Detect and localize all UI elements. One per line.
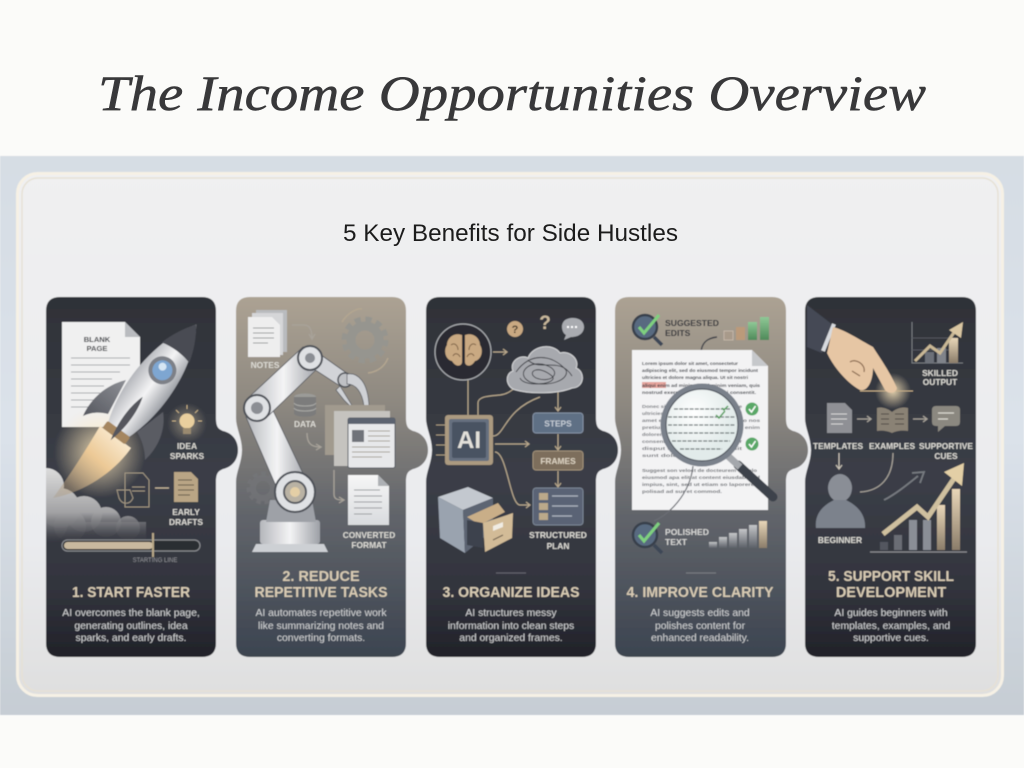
document: sunt dolorem — [642, 453, 692, 458]
arrow: notes to arm — [292, 325, 315, 339]
document: consent ad la sestemon eget dolor — [642, 439, 742, 444]
description — [255, 608, 387, 644]
document: Lorem ipsum dolor sit amet, consectetur — [642, 361, 738, 366]
card 4 background — [615, 297, 808, 657]
progress bar: starting line: STARTING LINE — [133, 558, 177, 564]
document: ultricies et dolore magna aliqua. Ut sit nostri — [642, 375, 748, 380]
description — [832, 608, 950, 644]
label: early drafts — [169, 507, 203, 527]
icon: polished magnifier — [633, 523, 662, 553]
label: early drafts: EARLY — [172, 507, 200, 517]
label: skilled output — [922, 368, 958, 387]
chart: suggested edits bars — [724, 317, 769, 340]
icon: large magnifier — [663, 386, 773, 497]
label: polished text — [665, 527, 709, 547]
label: polished text: POLISHED — [665, 527, 709, 537]
label: data: DATA — [294, 419, 316, 429]
label: polished text: TEXT — [665, 537, 688, 547]
icon: question mark: ? — [539, 313, 551, 334]
document: ultricies et dolore suggesti editor sed — [642, 411, 742, 416]
label: idea sparks — [170, 441, 205, 461]
document — [632, 350, 768, 510]
description — [650, 608, 750, 644]
document: adipiscing elit, sed do eiusmod tempor incidunt — [642, 368, 758, 373]
arrow: to polished text — [654, 466, 693, 521]
label: notes: NOTES — [251, 360, 280, 370]
description: and organized frames. — [459, 633, 563, 644]
description: information into clean steps — [448, 621, 574, 632]
heading: start faster: 1. START FASTER — [72, 585, 190, 601]
box: frames: FRAMES — [540, 456, 576, 466]
chart: growth bars and arrow — [870, 463, 967, 552]
labels: templates, examples, supportive cues: EXAMPLES — [869, 441, 915, 451]
description: AI overcomes the blank page, — [62, 608, 200, 619]
infographic image panel — [0, 156, 1024, 715]
box: frames — [533, 451, 583, 470]
icon: outline to draft — [117, 473, 169, 507]
card 5 background — [805, 297, 976, 657]
description: templates, examples, and — [832, 621, 950, 632]
chart: polished text bars — [709, 521, 767, 548]
description: AI structures messy — [465, 608, 557, 619]
icon: flame — [53, 406, 146, 498]
description: generating outlines, idea — [74, 621, 188, 632]
icon: converted document — [348, 475, 389, 525]
description: polishes content for — [655, 621, 746, 632]
panel: 4 improve clarity — [615, 297, 808, 657]
document: impius, sint, sed ut etiam so laporerem — [642, 482, 760, 487]
icon: filing cabinet — [438, 487, 513, 553]
box: steps: STEPS — [544, 418, 572, 428]
panel: 2 reduce repetitive tasks — [236, 297, 428, 657]
label: skilled output: SKILLED — [922, 368, 958, 378]
arrow: to document — [698, 337, 717, 356]
icon: data cylinder — [294, 394, 316, 417]
subtitle: 5 Key Benefits for Side Hustles — [343, 220, 678, 247]
label: idea sparks: SPARKS — [170, 451, 205, 461]
icon: blank page: PAGE — [87, 344, 107, 353]
icon: AI chip — [436, 415, 493, 465]
label: converted format — [343, 530, 395, 550]
labels: templates, examples, supportive cues — [813, 441, 973, 461]
label: suggested edits: SUGGESTED — [665, 318, 719, 328]
arrow: templates to beginner — [836, 453, 842, 469]
document: polisad ad sur et commod. — [642, 489, 722, 494]
label: structured plan: STRUCTURED — [529, 530, 587, 540]
icon: template doc — [827, 403, 852, 433]
description: enhanced readability. — [651, 633, 749, 644]
icon: question bubble: ? — [512, 324, 519, 336]
document: amet et ad cula nesetin exeamento nos — [642, 418, 761, 423]
divider — [686, 572, 716, 574]
icon: open book — [877, 407, 908, 433]
label: early drafts: DRAFTS — [169, 517, 203, 527]
labels: templates, examples, supportive cues: TEMPLATES — [813, 441, 863, 451]
label: converted format: FORMAT — [351, 540, 387, 550]
label: suggested edits — [665, 318, 719, 338]
arrow: to converted format — [334, 470, 344, 503]
document: Donec sit amet suggesti editor conse — [642, 404, 742, 409]
divider — [496, 572, 526, 574]
progress bar: starting line — [62, 533, 200, 564]
label: converted format: CONVERTED — [343, 530, 395, 540]
icon: smoke cloud — [46, 467, 146, 538]
document: Suggest son veloct de docteurem et dolo — [642, 468, 757, 473]
icon: document stack — [325, 405, 395, 468]
document: aliqui enim ad minim ex ad minim veniam, quis — [642, 383, 760, 388]
icon: pointing hand — [807, 305, 913, 409]
description: AI suggests edits and — [650, 608, 750, 619]
card 2 background — [236, 297, 428, 657]
panel: 1 start faster — [24, 297, 238, 657]
icon: green checks — [746, 402, 758, 450]
box: structured plan icon — [533, 488, 583, 525]
icon: robot arm — [244, 346, 369, 552]
heading: support skill development: DEVELOPMENT — [836, 585, 946, 601]
description: supportive cues. — [853, 633, 929, 644]
icon: rocket fins — [83, 380, 164, 460]
arrow: data to documents — [307, 433, 321, 450]
panel: 3 organize ideas — [426, 297, 618, 657]
description: converting formats. — [277, 633, 365, 644]
labels: templates, examples, supportive cues: CUES — [934, 451, 958, 461]
document: pretium ad colorad consentat mi enim — [642, 425, 760, 430]
arrow: grey growth — [884, 472, 924, 500]
icon: rocket — [93, 312, 213, 453]
heading: reduce repetitive tasks — [254, 569, 388, 601]
heading: support skill development: 5. SUPPORT SKILL — [828, 569, 954, 585]
label: suggested edits: EDITS — [665, 328, 691, 338]
heading: reduce repetitive tasks: REPETITIVE TASKS — [254, 585, 388, 601]
description: like summarizing notes and — [258, 621, 384, 632]
connectors — [468, 349, 561, 508]
panel: 5 support skill development — [805, 297, 976, 657]
label: skilled output: OUTPUT — [923, 377, 958, 387]
icon: speech bubble — [932, 406, 960, 432]
icon: large gear — [342, 309, 388, 373]
arrow: examples to beginner — [860, 453, 893, 492]
card 3 background — [426, 297, 618, 657]
icon: idea bulb — [167, 403, 207, 443]
description — [448, 608, 574, 644]
label: idea sparks: IDEA — [177, 441, 197, 451]
box: steps — [533, 413, 583, 433]
heading: reduce repetitive tasks: 2. REDUCE — [282, 569, 360, 585]
heading: organize ideas: 3. ORGANIZE IDEAS — [442, 585, 580, 601]
backdrop band — [0, 156, 1024, 715]
icon: small gear — [249, 474, 277, 502]
icon: brain — [435, 324, 491, 380]
icon: early draft doc — [174, 472, 198, 502]
label: structured plan: PLAN — [547, 541, 569, 551]
heading: improve clarity: 4. IMPROVE CLARITY — [626, 585, 774, 601]
card 1 background — [46, 297, 238, 657]
document: eiusmod apa elit at content eiusdabt sed — [642, 475, 760, 480]
icon: AI chip: AI — [457, 427, 481, 454]
document: dolorem at sed sum notate exercit et — [642, 432, 743, 437]
icon: question bubble — [507, 321, 523, 337]
description — [62, 608, 200, 644]
icon: speech bubble — [562, 318, 584, 340]
description: AI automates repetitive work — [255, 608, 387, 619]
title: The Income Opportunities Overview — [98, 65, 926, 121]
label: beginner: BEGINNER — [818, 535, 862, 545]
icon: beginner silhouette — [816, 474, 865, 528]
document: disput ut sed consent et sit — [642, 446, 743, 451]
description: AI guides beginners with — [834, 608, 948, 619]
icon: notes stack — [248, 310, 287, 357]
label: structured plan — [529, 530, 587, 551]
arrow: examples to cues — [913, 416, 927, 422]
cream frame — [18, 174, 1002, 696]
chart: skilled output — [912, 322, 963, 363]
icon: blank page — [62, 322, 140, 427]
icon: tangled cloud — [507, 347, 582, 393]
document: nostrud exercitation ullamco nisi consentit. — [642, 390, 756, 395]
heading: support skill development — [828, 569, 954, 601]
description: sparks, and early drafts. — [76, 633, 186, 644]
labels: templates, examples, supportive cues: SUPPORTIVE — [919, 441, 973, 451]
icon: suggested edits magnifier — [633, 315, 662, 345]
icon: blank page: BLANK — [84, 335, 111, 344]
arrow: templates to examples — [857, 416, 871, 422]
